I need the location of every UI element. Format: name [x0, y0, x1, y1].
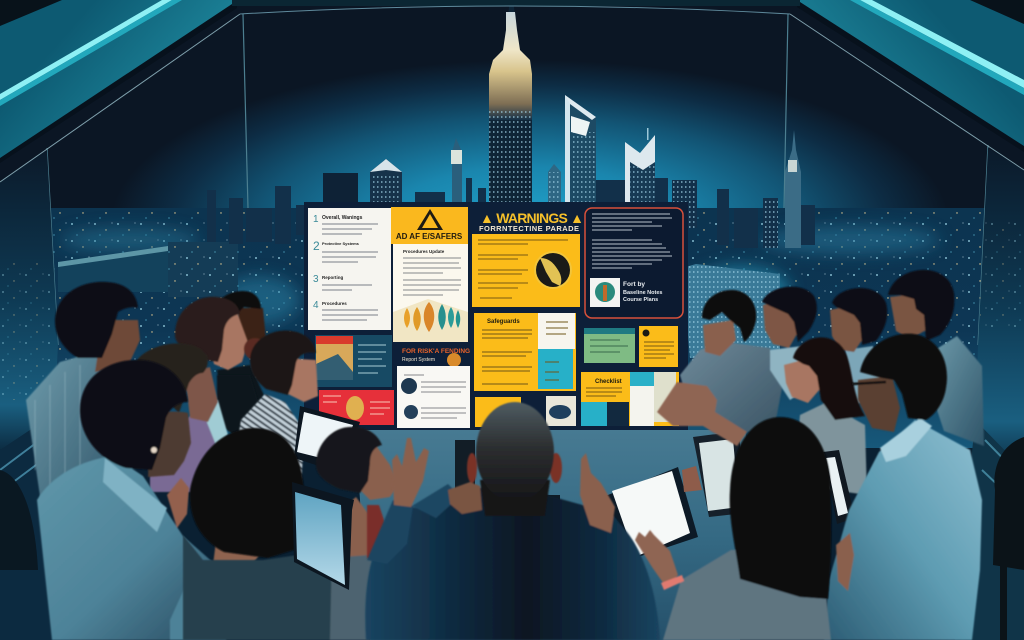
panel: yellow safety guide	[474, 313, 576, 391]
tower: notched top	[625, 128, 655, 203]
panel: fire heading: Report System	[402, 357, 435, 363]
panel: dark notes with red outline: Course Plans	[623, 297, 658, 303]
panel: numbered list	[308, 208, 391, 330]
person: man in front left	[37, 360, 263, 640]
ceiling left	[0, 0, 240, 182]
panel: numbered list: Procedures	[322, 301, 347, 306]
warning board	[304, 202, 688, 430]
panel: numbered list: 1	[313, 214, 319, 225]
meeting table	[355, 430, 760, 640]
panel: numbered list: 2	[313, 239, 320, 253]
panel: green notice	[584, 328, 635, 363]
panel: small yellow note	[639, 326, 678, 367]
panel: warnings title: FORRNTECTINE PARADE	[479, 224, 579, 233]
panel: checklist collage: Checklist	[595, 379, 622, 385]
panel: yellow warning header: AD AF E/SAFERS	[396, 232, 463, 241]
skyline towers	[207, 0, 815, 248]
tower: glass wedge	[565, 95, 596, 202]
person: woman long hair right	[784, 337, 867, 495]
tablet: far right	[823, 450, 855, 524]
panel: dark notes with red outline: Fort by	[623, 281, 645, 288]
chair: left corner	[0, 470, 38, 570]
panel: numbered list: Reporting	[322, 275, 343, 280]
person: man far right glasses	[888, 270, 984, 446]
ceiling top edge	[232, 0, 800, 6]
person: woman long black hair front	[635, 417, 831, 640]
panel: white guide with flames: Procedures Update	[403, 249, 445, 254]
floor lower corners	[0, 410, 1024, 640]
panel: dark notes with red outline	[585, 208, 683, 318]
person: far left man	[26, 282, 140, 510]
window mullions	[47, 14, 988, 345]
panel: white guide with flames	[393, 244, 468, 342]
panel: fire heading	[397, 348, 470, 428]
tablet: front left screen	[292, 482, 354, 590]
panel: yellow warning header	[391, 207, 468, 244]
panel: warnings title: ▲ WARNINGS ▲	[480, 210, 584, 226]
person: central bald man, back view	[365, 402, 660, 640]
panel: numbered list: 3	[313, 274, 319, 285]
person: man third right	[830, 288, 887, 406]
person: man behind group	[217, 291, 266, 430]
person: woman with braided hair	[316, 427, 398, 560]
panel: yellow protective procedures	[472, 234, 580, 307]
person: man gesturing grey shirt	[657, 290, 782, 446]
panel: lower yellow tag	[475, 397, 521, 427]
panel: numbered list: Overall, Wanings	[322, 215, 363, 221]
person: man centre back right	[762, 287, 820, 400]
panel: warnings title	[479, 210, 584, 233]
chair: right corner	[993, 437, 1024, 640]
person: man front right glasses	[824, 334, 982, 640]
panel: badge card	[546, 396, 576, 426]
tablet: centre objects	[455, 440, 560, 528]
panel: teal map card	[315, 335, 392, 387]
panel: dark notes with red outline: Baseline Notes	[623, 290, 662, 296]
tablet: small left	[294, 406, 360, 474]
main skyscraper	[489, 0, 532, 202]
tablet: right mid	[682, 431, 745, 517]
panel: red card	[319, 390, 394, 425]
tablet: large white	[588, 467, 698, 557]
panel: yellow safety guide: Safeguards	[487, 319, 520, 325]
person: woman long dark hair	[183, 428, 372, 640]
panel: fire heading: FOR RISK'A FENDING	[402, 348, 470, 355]
side glass walls	[0, 148, 1024, 470]
ceiling right	[790, 0, 1024, 170]
background: night sky window	[0, 0, 1024, 360]
cityscape lights below skyline	[48, 208, 988, 448]
panel: numbered list: 4	[313, 300, 319, 311]
person: woman brown hair	[175, 297, 262, 435]
person: woman with bun striped shirt	[233, 331, 318, 482]
panel: numbered list: Protective Systems	[322, 241, 360, 246]
person: woman purple shirt	[137, 343, 228, 492]
panel: checklist collage	[581, 372, 679, 426]
